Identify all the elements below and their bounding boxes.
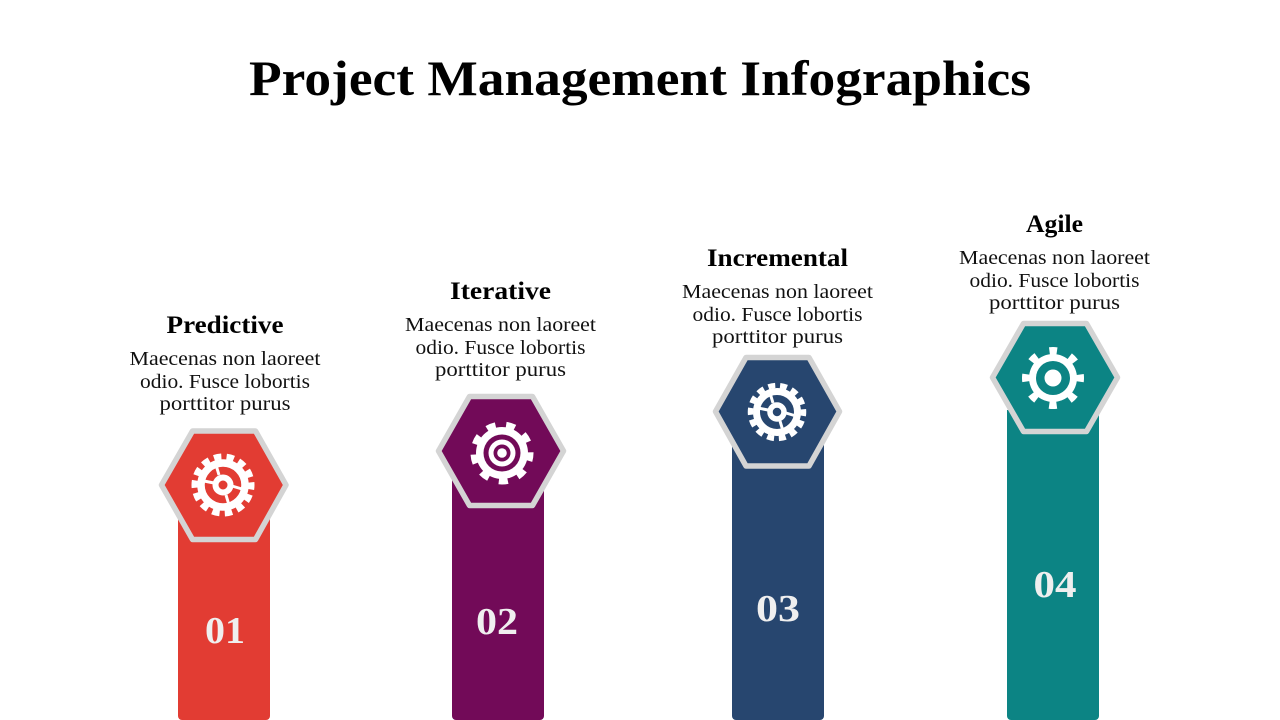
- text block: Predictive description: Maecenas non laoreet: [130, 348, 321, 370]
- number: 01: 01: [205, 610, 245, 652]
- text block: Agile description: [959, 247, 1150, 314]
- panel: step 1 Predictive: [130, 312, 321, 720]
- panel: step 2 Iterative: [405, 278, 596, 720]
- hexagon: teal badge: [992, 324, 1118, 432]
- text block: Predictive description: [130, 348, 321, 415]
- number: 02: 02: [476, 601, 518, 643]
- text block: Incremental description: Maecenas non laoreet: [682, 281, 873, 303]
- text block: Incremental description: porttitor purus: [712, 326, 843, 348]
- text block: Iterative description: [405, 314, 596, 381]
- number: 03: 03: [756, 588, 800, 630]
- bar: teal column: [1007, 410, 1099, 720]
- bar: navy column: [732, 440, 824, 720]
- icon: gear 3: [750, 386, 804, 438]
- icon: gear 1: [194, 456, 252, 514]
- title: Project Management Infographics: [249, 50, 1031, 106]
- text block: Predictive description: odio. Fusce lobortis: [140, 371, 310, 393]
- icon: gear 4: [1026, 351, 1080, 405]
- panel: step 4 Agile: [959, 211, 1150, 720]
- heading: Iterative: Iterative: [450, 278, 551, 305]
- number: 04: 04: [1034, 564, 1076, 606]
- bar: purple column: [452, 480, 544, 720]
- text block: Incremental description: odio. Fusce lobortis: [692, 304, 863, 326]
- bar: red column: [178, 510, 270, 720]
- text block: Iterative description: odio. Fusce lobortis: [416, 337, 586, 359]
- text block: Predictive description: porttitor purus: [160, 393, 291, 415]
- text block: Agile description: odio. Fusce lobortis: [970, 270, 1140, 292]
- hexagon: navy badge: [716, 358, 840, 466]
- icon: gear 2: [474, 425, 530, 481]
- hexagon: purple badge: [438, 396, 564, 506]
- text block: Iterative description: porttitor purus: [435, 359, 566, 381]
- heading: Incremental: Incremental: [707, 245, 848, 272]
- panel: step 3 Incremental: [682, 245, 873, 720]
- text block: Agile description: Maecenas non laoreet: [959, 247, 1150, 269]
- heading: Predictive: Predictive: [166, 312, 284, 339]
- hexagon: red badge: [162, 431, 286, 540]
- heading: Agile: Agile: [1026, 211, 1083, 238]
- text block: Incremental description: [682, 281, 873, 348]
- text block: Iterative description: Maecenas non laoreet: [405, 314, 596, 336]
- text block: Agile description: porttitor purus: [989, 292, 1120, 314]
